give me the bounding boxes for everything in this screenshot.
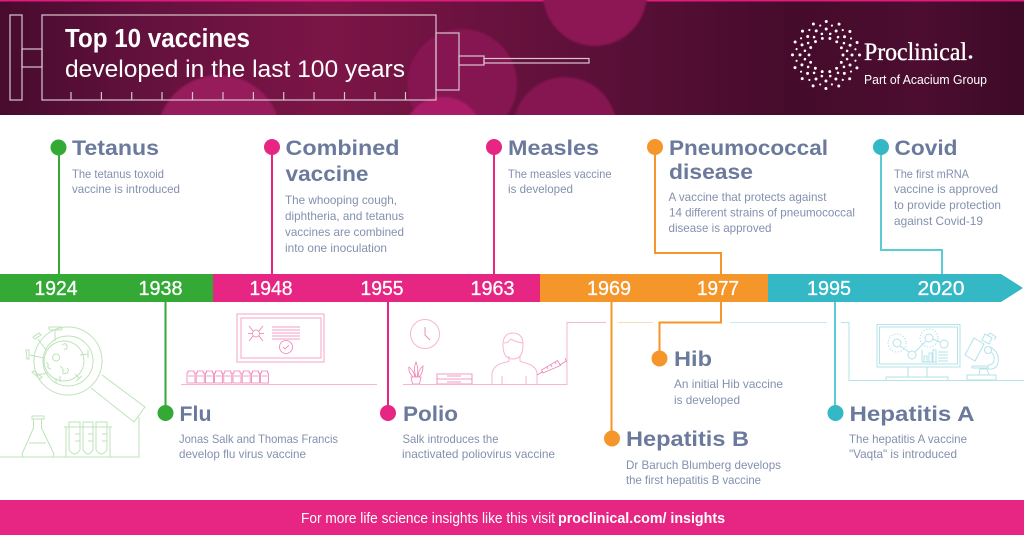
event: Pneumococcal disease: A vaccine that protects against <box>668 190 827 204</box>
event: Combined vaccine <box>264 136 404 274</box>
event: Hepatitis A: The hepatitis A vaccine <box>849 432 967 446</box>
logo: Proclinical <box>791 20 987 90</box>
logo: Proclinical: Part of Acacium Group <box>864 73 987 87</box>
vaccine syringe <box>537 358 567 375</box>
event: Combined vaccine: The whooping cough, <box>285 193 397 207</box>
year labels: 1995 <box>807 278 851 300</box>
event: Covid <box>873 136 1001 274</box>
event: Pneumococcal disease: disease <box>669 160 753 184</box>
event: Hib <box>652 302 783 407</box>
year labels: 1977 <box>697 278 739 300</box>
microscope <box>965 333 998 380</box>
year labels: 2020 <box>918 278 964 300</box>
title <box>65 25 405 83</box>
information board <box>237 314 324 362</box>
event: Measles: Measles <box>508 136 599 160</box>
stand line <box>0 417 139 457</box>
event: Pneumococcal disease <box>647 136 855 274</box>
year labels: 1955 <box>360 278 404 300</box>
header banner <box>0 0 1024 115</box>
event: Hib: Hib <box>674 347 712 371</box>
year labels: 1924 <box>34 278 78 300</box>
vials <box>187 371 269 383</box>
event: Hepatitis A: Hepatitis A <box>850 402 974 426</box>
event: Hepatitis B: Hepatitis B <box>626 427 749 451</box>
year labels <box>34 278 964 300</box>
event: Hib: An initial Hib vaccine <box>674 377 783 391</box>
timeline bar <box>0 274 1023 302</box>
event: Flu <box>158 302 338 461</box>
books <box>437 374 472 384</box>
event: Tetanus: vaccine is introduced <box>72 182 180 196</box>
event: Hepatitis B <box>604 302 781 487</box>
event: Flu: develop flu virus vaccine <box>179 447 306 461</box>
decorative rule segments <box>618 322 653 324</box>
patient <box>492 333 537 384</box>
title: Top 10 vaccines <box>65 25 250 53</box>
illustration: vaccine board and vials <box>181 314 377 384</box>
event: Pneumococcal disease: Pneumococcal <box>669 136 828 160</box>
virus <box>26 327 88 383</box>
event: Hib: is developed <box>674 393 740 407</box>
illustration: monitor and microscope <box>841 322 1024 380</box>
event: Combined vaccine: vaccine <box>286 162 369 186</box>
event: Polio <box>380 302 555 461</box>
event: Covid: to provide protection <box>894 198 1001 212</box>
event: Covid: against Covid-19 <box>894 214 983 228</box>
event: Combined vaccine: diphtheria, and tetanus <box>285 209 404 223</box>
event: Measles: The measles vaccine <box>508 167 612 181</box>
year labels: 1948 <box>250 278 292 300</box>
event: Polio: Salk introduces the <box>402 432 499 446</box>
event: Covid: Covid <box>894 136 958 160</box>
event: Covid: The first mRNA <box>894 167 969 181</box>
room outline <box>403 322 606 384</box>
clock <box>410 320 440 348</box>
event: Hepatitis B: the first hepatitis B vaccine <box>626 473 761 487</box>
event: Polio: inactivated poliovirus vaccine <box>402 447 555 461</box>
monitor <box>877 324 960 380</box>
footer banner: proclinical.com/ insights <box>558 511 725 527</box>
event: Flu: Jonas Salk and Thomas Francis <box>179 432 338 446</box>
logo: Proclinical: Proclinical <box>864 39 967 66</box>
year labels: 1963 <box>470 278 514 300</box>
test tubes <box>64 422 112 457</box>
event: Combined vaccine: Combined <box>286 136 400 160</box>
illustration: magnifier, flask and test tubes <box>0 327 145 457</box>
event: Pneumococcal disease: 14 different strains of pneumococcal <box>669 206 855 220</box>
event: Measles <box>486 136 612 274</box>
year labels: 1938 <box>138 278 182 300</box>
event: Combined vaccine: vaccines are combined <box>285 225 404 239</box>
event: Measles: is developed <box>508 182 573 196</box>
footer banner: For more life science insights like this visit <box>301 511 555 527</box>
event: Covid: vaccine is approved <box>894 182 998 196</box>
flask <box>22 416 54 457</box>
event: Hepatitis A <box>828 302 974 461</box>
event: Tetanus: The tetanus toxoid <box>72 167 164 181</box>
event: Flu: Flu <box>180 402 212 426</box>
plant <box>409 362 423 384</box>
event: Hepatitis A: "Vaqta" is introduced <box>849 447 957 461</box>
event: Tetanus <box>50 136 180 274</box>
title: developed in the last 100 years <box>65 56 405 83</box>
event: Hepatitis B: Dr Baruch Blumberg develops <box>626 458 781 472</box>
magnifying glass <box>34 327 145 422</box>
event: Combined vaccine: into one inoculation <box>285 241 387 255</box>
event: Tetanus: Tetanus <box>72 136 159 160</box>
syringe outline <box>10 15 589 100</box>
footer banner <box>0 500 1024 535</box>
event: Polio: Polio <box>403 402 458 426</box>
event: Pneumococcal disease: disease is approved <box>668 221 772 235</box>
year labels: 1969 <box>587 278 631 300</box>
illustration: clock, desk and patient <box>403 320 606 384</box>
